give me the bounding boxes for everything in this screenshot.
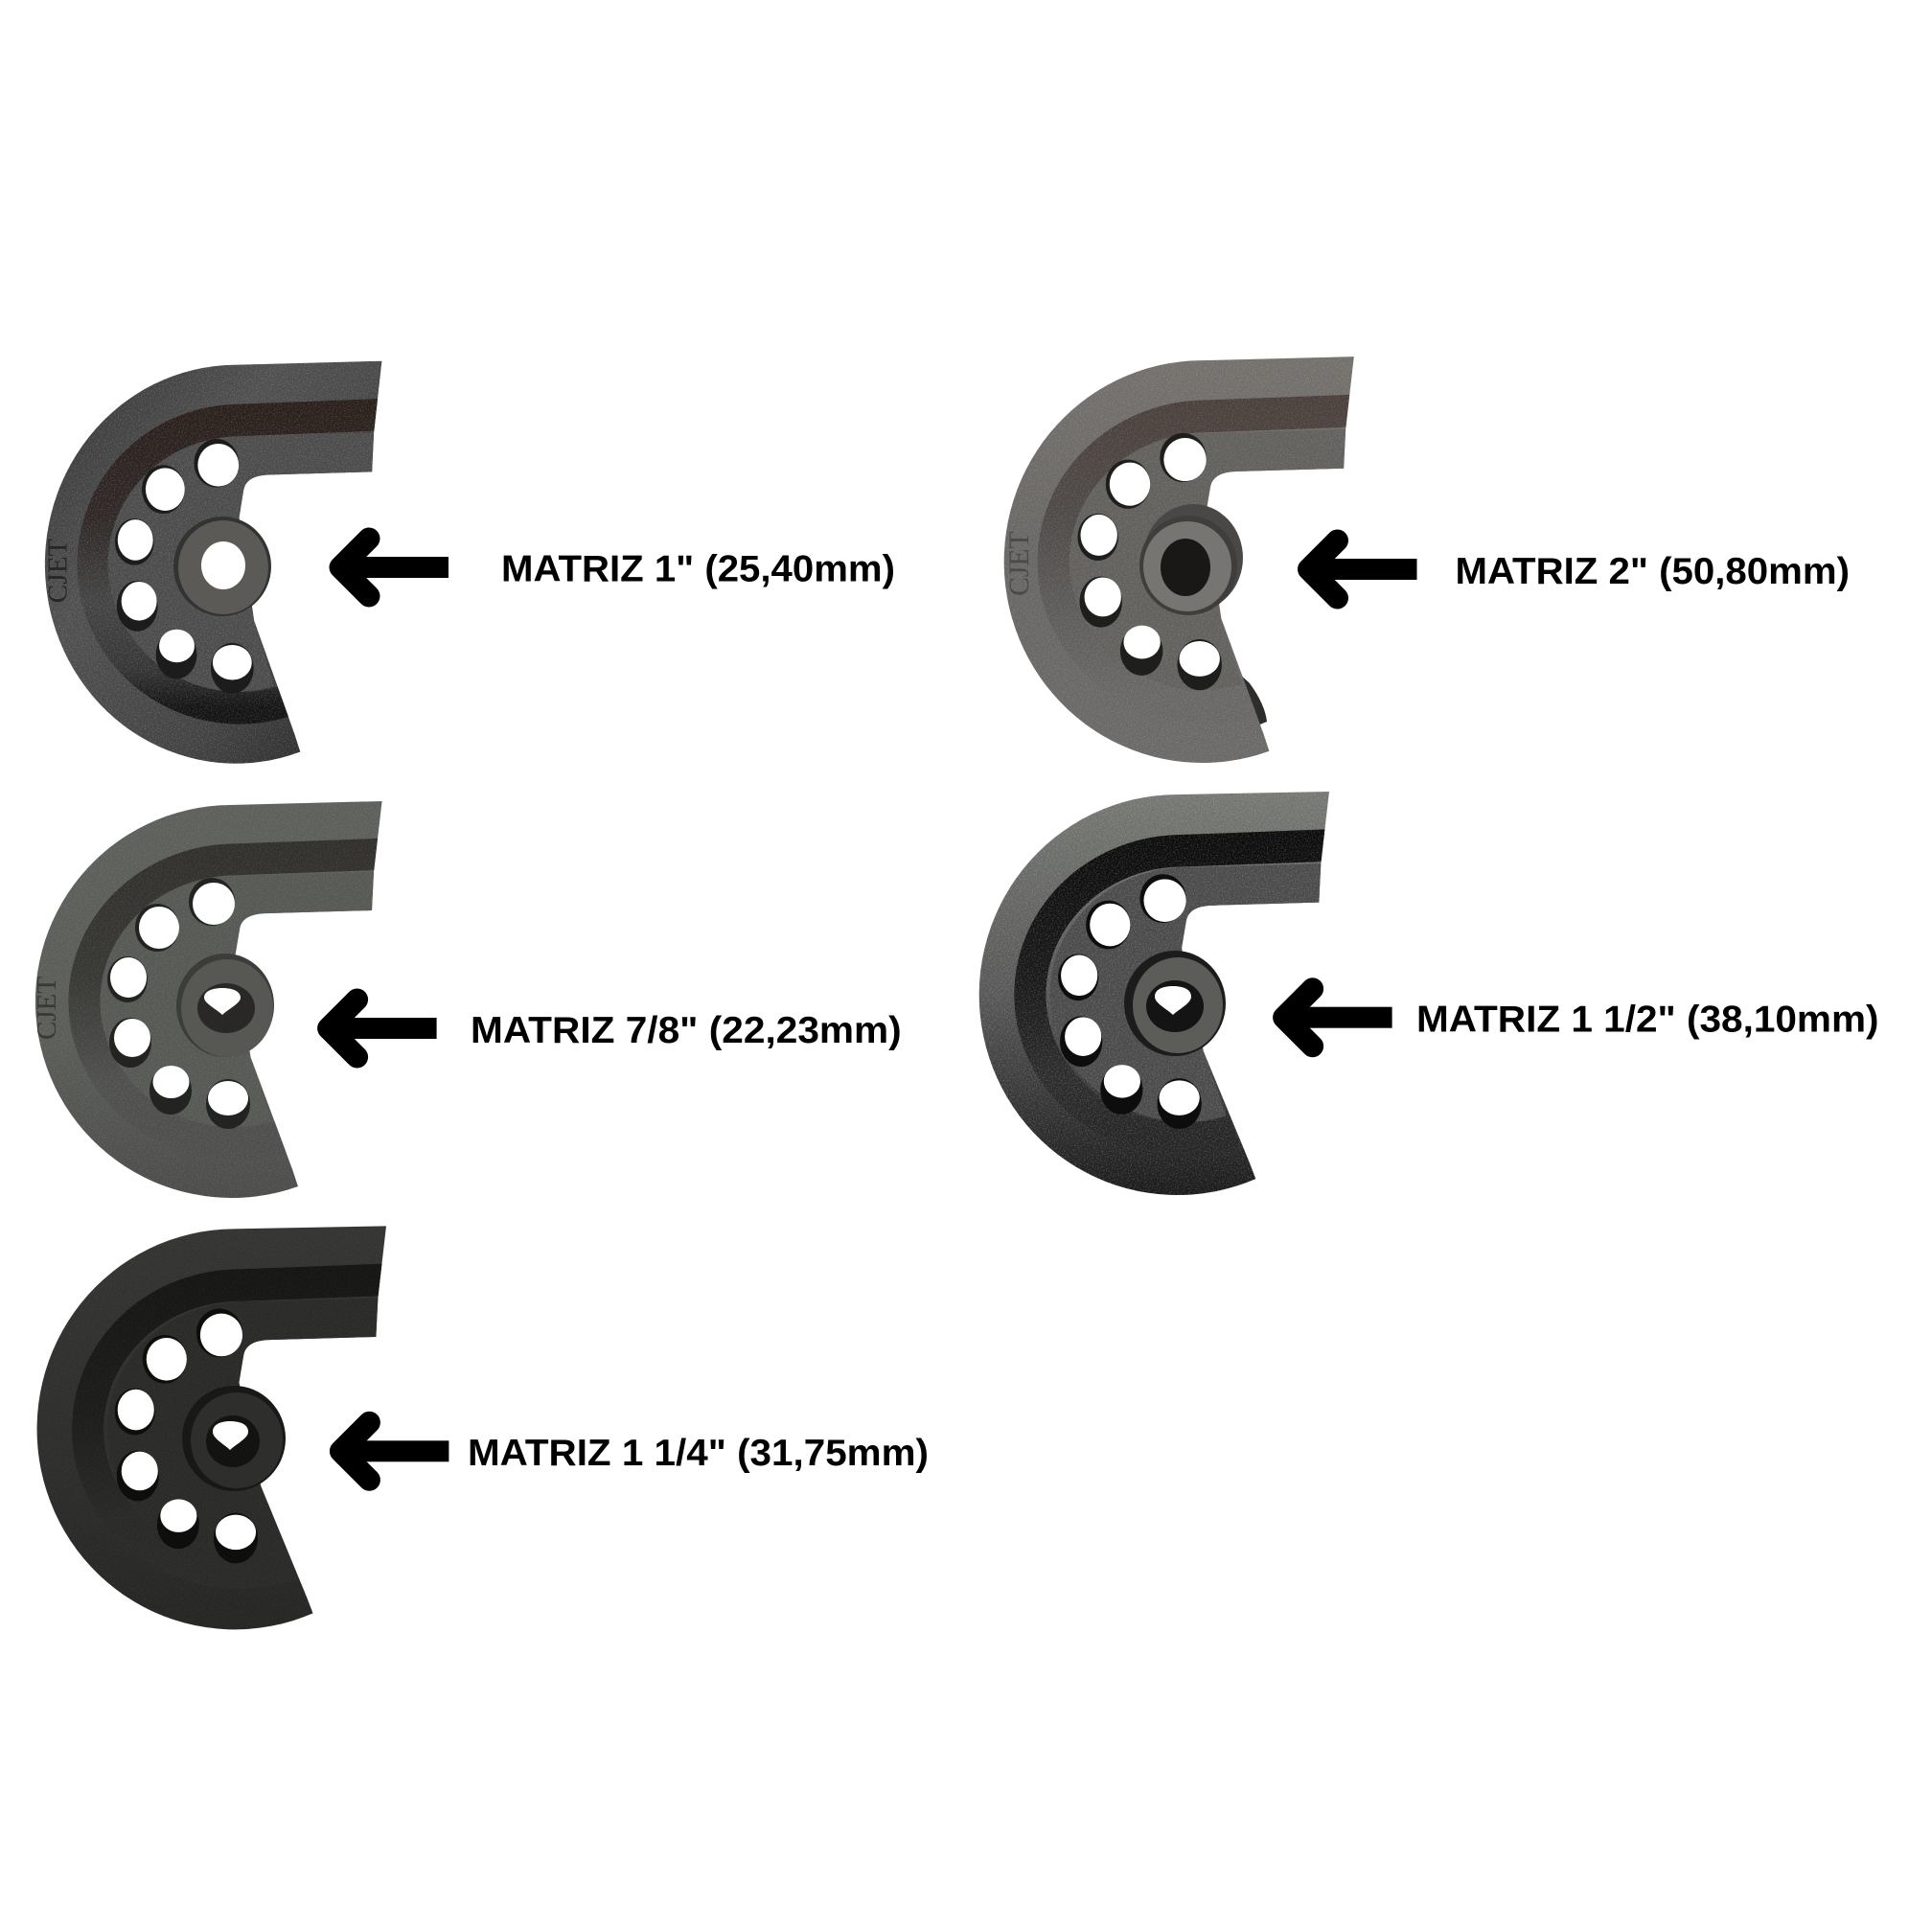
label: 2 inch matrix: MATRIZ 2" (50,80mm) <box>1455 551 1850 592</box>
arrow: 2 inch matrix <box>1309 540 1416 598</box>
hub: 7/8 inch matrix <box>176 954 274 1057</box>
arrow: 1 1/4 inch matrix <box>340 1422 448 1480</box>
arrow: 1 inch matrix <box>340 539 448 596</box>
label: 1 1/2 inch matrix: MATRIZ 1 1/2" (38,10mm) <box>1416 1000 1878 1041</box>
die photo: 1 inch matrix: CJET <box>43 539 73 603</box>
arrow: 1 1/2 inch matrix <box>1284 989 1392 1046</box>
die photo: 2 inch matrix: CJET <box>1004 531 1035 596</box>
label: 1 1/4 inch matrix: MATRIZ 1 1/4" (31,75mm) <box>468 1433 929 1474</box>
hub: 1 inch matrix <box>173 517 271 616</box>
hub: 2 inch matrix <box>1139 504 1243 615</box>
label: 7/8 inch matrix: MATRIZ 7/8" (22,23mm) <box>471 1010 902 1051</box>
die photo: 1 inch matrix <box>43 361 388 764</box>
hub: 1 1/2 inch matrix <box>1124 951 1226 1056</box>
die photo: 7/8 inch matrix <box>32 801 388 1198</box>
label: 1 inch matrix: MATRIZ 1" (25,40mm) <box>501 549 895 590</box>
die photo: 1 1/2 inch matrix <box>979 792 1335 1195</box>
die photo: 2 inch matrix <box>1004 356 1360 763</box>
die photo: 7/8 inch matrix: CJET <box>32 977 62 1040</box>
hub: 1 1/4 inch matrix <box>182 1386 286 1491</box>
tab: 2 inch matrix lower edge <box>1236 671 1267 728</box>
infographic canvas <box>34 356 1876 1629</box>
die photo: 1 1/4 inch matrix <box>37 1226 392 1629</box>
arrow: 7/8 inch matrix <box>329 1000 437 1057</box>
